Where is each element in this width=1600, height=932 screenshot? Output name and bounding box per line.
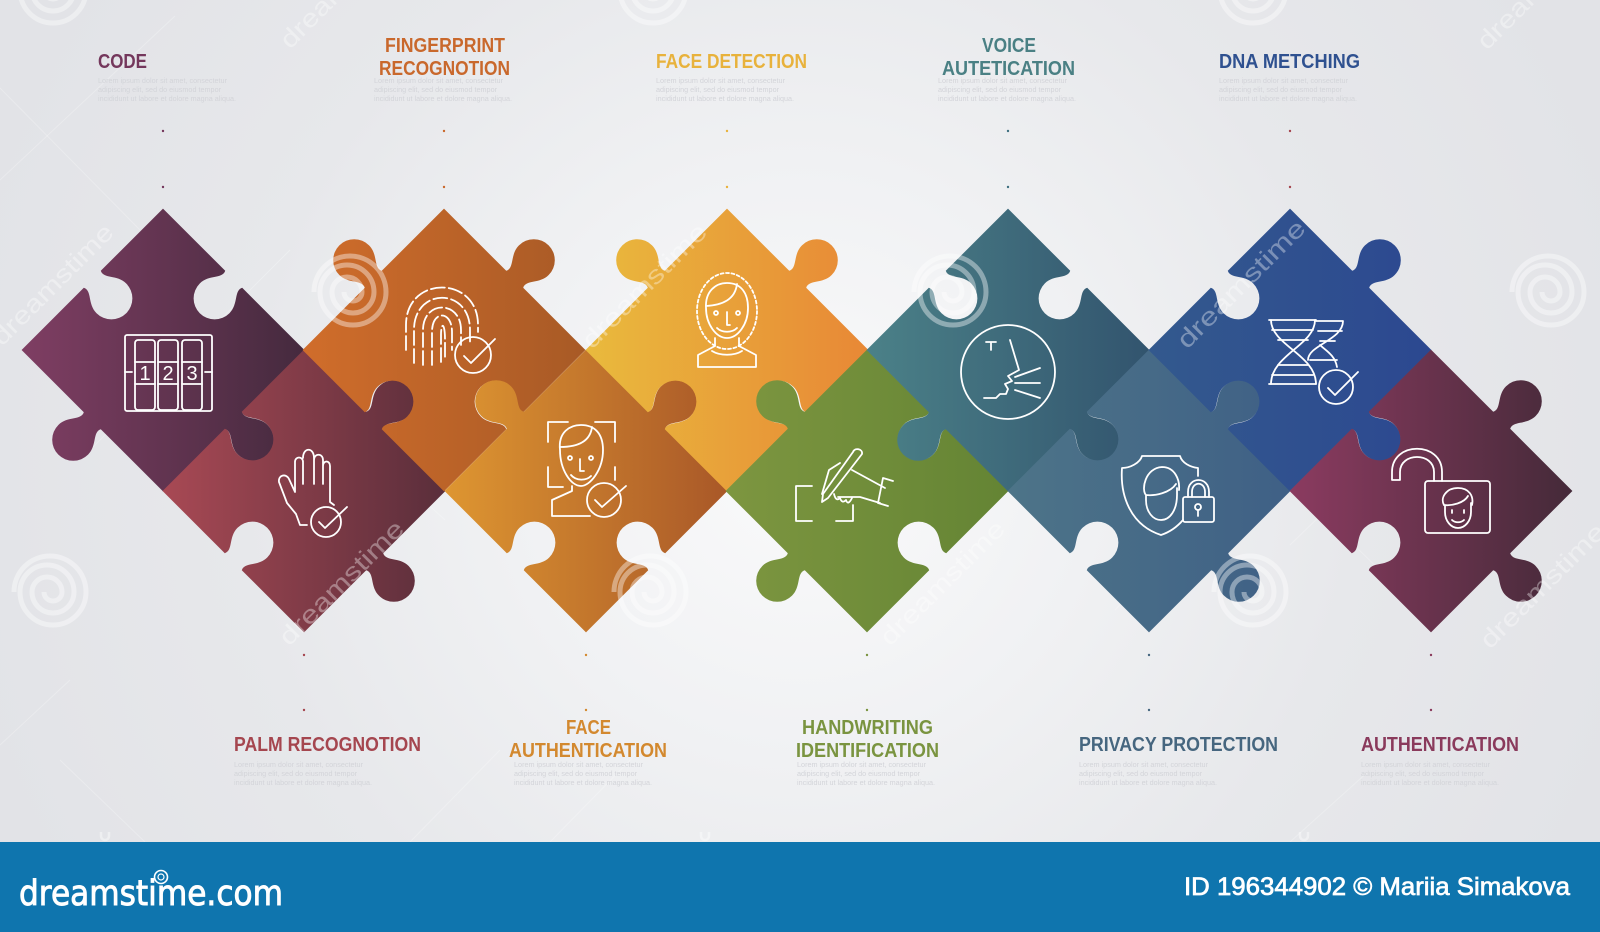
icon: fingerprint with check xyxy=(406,288,495,373)
icon: palm with check xyxy=(279,450,347,537)
icon: hand writing with pen xyxy=(796,449,893,521)
heading: privacy protection: PRIVACY PROTECTION xyxy=(1079,734,1278,756)
text block: face detection: incididunt ut labore et dolore magna aliqua. xyxy=(656,94,794,103)
heading: voice autetication xyxy=(942,35,1075,80)
watermark text: dreamstime xyxy=(874,515,1011,651)
icon: number code lock: 3 xyxy=(186,363,198,385)
label: privacy protection xyxy=(1079,734,1278,787)
text block: dna: adipiscing elit, sed do eiusmod tempor xyxy=(1219,85,1342,94)
label: voice autetication xyxy=(938,35,1076,103)
text block: face detection: Lorem ipsum dolor sit amet, consectetur xyxy=(656,76,785,85)
text block: privacy: adipiscing elit, sed do eiusmod tempor xyxy=(1079,769,1202,778)
heading: handwriting identification: IDENTIFICATION xyxy=(796,740,939,762)
label: palm recognotion xyxy=(234,734,421,787)
icon: speaking profile in circle xyxy=(961,325,1055,419)
panel: dna matching piece xyxy=(1149,175,1499,525)
text block: dna: incididunt ut labore et dolore magna aliqua. xyxy=(1219,94,1357,103)
text block: fingerprint xyxy=(374,76,512,103)
text block: face detection xyxy=(656,76,794,103)
text block: palm: adipiscing elit, sed do eiusmod tempor xyxy=(234,769,357,778)
text block: code xyxy=(98,76,236,103)
icon: open padlock with face xyxy=(1392,449,1490,533)
heading: handwriting identification: HANDWRITING xyxy=(802,717,933,739)
puzzle piece: fingerprint xyxy=(269,141,619,491)
text block: dna xyxy=(1219,76,1357,103)
panel: voice authentication piece xyxy=(833,209,1183,559)
connector dots xyxy=(162,130,1432,711)
panel: fingerprint piece xyxy=(269,141,619,491)
text block: code: adipiscing elit, sed do eiusmod tempor xyxy=(98,85,221,94)
heading: authentication: AUTHENTICATION xyxy=(1361,734,1519,756)
label: face detection xyxy=(656,51,807,103)
panel: authentication piece xyxy=(1290,316,1600,666)
heading: code: CODE xyxy=(98,51,147,73)
text block: palm xyxy=(234,760,372,787)
panel: handwriting piece xyxy=(658,316,1008,666)
puzzle piece: code xyxy=(0,209,338,559)
text block: handwriting: adipiscing elit, sed do eiusmod tempor xyxy=(797,769,920,778)
text block: face detection: adipiscing elit, sed do eiusmod tempor xyxy=(656,85,779,94)
text block: fingerprint: incididunt ut labore et dolore magna aliqua. xyxy=(374,94,512,103)
panel: face detection piece xyxy=(552,141,902,491)
icon: shield, face and padlock xyxy=(1122,456,1214,535)
label: code xyxy=(98,51,236,103)
text block: code: Lorem ipsum dolor sit amet, consectetur xyxy=(98,76,227,85)
text block: handwriting: incididunt ut labore et dolore magna aliqua. xyxy=(797,778,935,787)
heading: voice autetication: AUTETICATION xyxy=(942,58,1075,80)
panel: palm recognition piece xyxy=(163,316,513,666)
panel: privacy protection piece xyxy=(1008,316,1358,666)
puzzle piece: voice xyxy=(833,209,1183,559)
text block: handwriting xyxy=(797,760,935,787)
footer bar xyxy=(0,842,1600,932)
text block: privacy xyxy=(1079,760,1217,787)
label: face authentication xyxy=(509,717,667,787)
text block: code: incididunt ut labore et dolore magna aliqua. xyxy=(98,94,236,103)
panel: code piece xyxy=(0,209,338,559)
puzzle piece: handwriting xyxy=(658,316,1008,666)
text block: face authentication xyxy=(514,760,652,787)
icon: framed face with check xyxy=(548,422,626,517)
heading: face authentication: FACE xyxy=(566,717,611,739)
text block: authentication: incididunt ut labore et dolore magna aliqua. xyxy=(1361,778,1499,787)
icon: dna with check xyxy=(1269,320,1358,404)
text block: privacy: Lorem ipsum dolor sit amet, consectetur xyxy=(1079,760,1208,769)
heading: voice autetication: VOICE xyxy=(982,35,1036,57)
heading: face authentication: AUTHENTICATION xyxy=(509,740,667,762)
text block: face authentication: incididunt ut labore et dolore magna aliqua. xyxy=(514,778,652,787)
watermark text: dreamstime xyxy=(1171,214,1311,354)
puzzle piece: face detection xyxy=(552,141,902,491)
text block: face authentication: Lorem ipsum dolor sit amet, consectetur xyxy=(514,760,643,769)
text block: dna: Lorem ipsum dolor sit amet, consectetur xyxy=(1219,76,1348,85)
icon: number code lock xyxy=(125,335,212,411)
text block: voice: Lorem ipsum dolor sit amet, consectetur xyxy=(938,76,1067,85)
heading: fingerprint recognotion: FINGERPRINT xyxy=(385,35,505,57)
puzzle piece: authentication xyxy=(1290,316,1600,666)
text block: authentication: adipiscing elit, sed do eiusmod tempor xyxy=(1361,769,1484,778)
footer image id and author: ID 196344902 © Mariia Simakova xyxy=(1184,873,1570,901)
label: authentication xyxy=(1361,734,1519,787)
footer logo: dreamstime.com xyxy=(19,874,283,914)
heading: dna metching: DNA METCHING xyxy=(1219,51,1360,73)
puzzle piece: dna xyxy=(1149,175,1499,525)
text block: fingerprint: Lorem ipsum dolor sit amet, consectetur xyxy=(374,76,503,85)
text block: fingerprint: adipiscing elit, sed do eiusmod tempor xyxy=(374,85,497,94)
text block: palm: Lorem ipsum dolor sit amet, consectetur xyxy=(234,760,363,769)
puzzle piece: privacy xyxy=(1008,316,1358,666)
text block: palm: incididunt ut labore et dolore magna aliqua. xyxy=(234,778,372,787)
heading: face authentication xyxy=(509,717,667,762)
heading: handwriting identification xyxy=(796,717,939,762)
watermark text: dreamstime xyxy=(1474,518,1600,654)
watermark text: dreamstime xyxy=(273,515,410,651)
label: dna metching xyxy=(1219,51,1360,103)
watermark text xyxy=(0,0,1600,654)
label: handwriting identification xyxy=(796,717,939,787)
heading: fingerprint recognotion xyxy=(379,35,510,80)
heading: fingerprint recognotion: RECOGNOTION xyxy=(379,58,510,80)
text block: handwriting: Lorem ipsum dolor sit amet, consectetur xyxy=(797,760,926,769)
puzzle piece: palm xyxy=(163,316,513,666)
heading: palm recognotion: PALM RECOGNOTION xyxy=(234,734,421,756)
watermark text: dreamstime xyxy=(576,218,713,354)
text block: voice: adipiscing elit, sed do eiusmod tempor xyxy=(938,85,1061,94)
text block: face authentication: adipiscing elit, sed do eiusmod tempor xyxy=(514,769,637,778)
text block: voice: incididunt ut labore et dolore magna aliqua. xyxy=(938,94,1076,103)
text block: privacy: incididunt ut labore et dolore magna aliqua. xyxy=(1079,778,1217,787)
puzzle piece: face authentication xyxy=(411,282,761,632)
text block: voice xyxy=(938,76,1076,103)
heading: face detection: FACE DETECTION xyxy=(656,51,807,73)
icon: face with dotted detection outline xyxy=(697,273,757,367)
icon: number code lock: 2 xyxy=(162,363,174,385)
text block: authentication xyxy=(1361,760,1499,787)
text block: authentication: Lorem ipsum dolor sit amet, consectetur xyxy=(1361,760,1490,769)
panel: face authentication piece xyxy=(411,282,761,632)
label: fingerprint recognotion xyxy=(374,35,512,103)
icon: number code lock: 1 xyxy=(139,363,151,385)
